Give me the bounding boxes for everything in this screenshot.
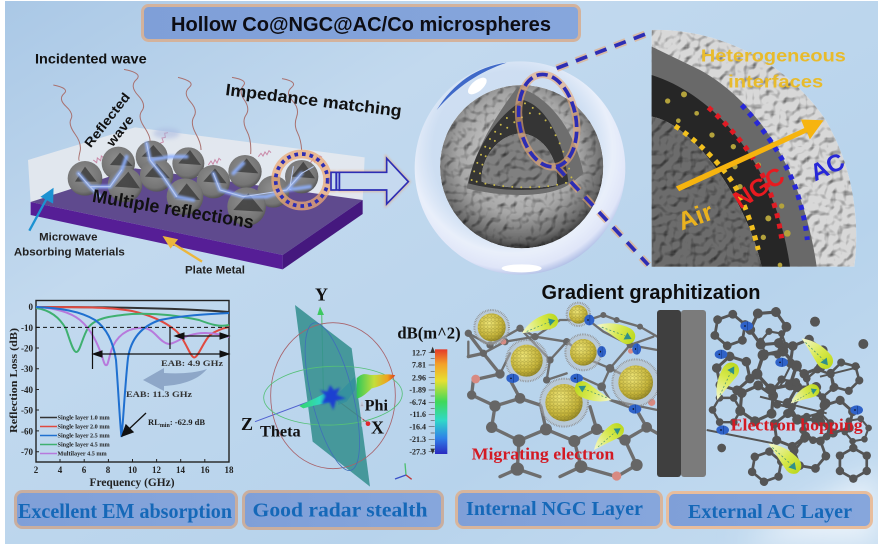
caption: excellent EM absorption xyxy=(16,492,236,528)
axis labels xyxy=(241,285,389,441)
label: electron hopping: Electron hopping xyxy=(731,416,863,435)
x axis tick labels: 4 xyxy=(58,465,63,475)
y axis tick labels: 0 xyxy=(28,302,34,312)
highlighted sphere dotted ring xyxy=(276,154,328,206)
block arrow to enlarged sphere xyxy=(331,158,408,204)
label: plate metal: Plate Metal xyxy=(185,264,245,276)
panel: external AC amorphous network xyxy=(704,299,875,489)
heading: gradient graphitization: Gradient graphitization xyxy=(542,281,760,304)
label: microwave absorbing materials xyxy=(14,231,125,259)
label: NGC: NGC xyxy=(729,162,790,214)
axis titles: Reflection Loss (dB) xyxy=(8,328,20,433)
panel: internal NGC graphene network xyxy=(465,303,659,481)
phi pointer xyxy=(360,401,364,427)
x axis tick labels: 18 xyxy=(224,465,234,475)
label: RL min: : -62.9 dB xyxy=(170,417,205,427)
axis titles xyxy=(8,328,175,489)
label: microwave absorbing materials: Absorbing Materials xyxy=(14,247,125,259)
label: incidented wave: Incidented wave xyxy=(35,51,147,66)
arrow: RL min pointer xyxy=(122,413,146,436)
EAB labels: EAB: 11.3 GHz xyxy=(126,389,192,399)
title banner xyxy=(142,6,580,40)
colour bar tick labels: -11.6 xyxy=(410,410,426,419)
x axis tick labels xyxy=(34,465,234,475)
label: heterogeneous interfaces xyxy=(701,46,846,92)
axis titles: Frequency (GHz) xyxy=(90,477,175,489)
bumpy sphere shell xyxy=(440,85,603,248)
interface dotted lines xyxy=(675,105,807,250)
legend: Single layer 4.5 mm xyxy=(58,442,110,448)
label: heterogeneous interfaces: interfaces xyxy=(728,72,823,92)
legend xyxy=(40,414,110,458)
colour bar tick labels: -16.4 xyxy=(409,422,426,431)
colour bar tick labels: -21.3 xyxy=(409,435,426,444)
label: AC: AC xyxy=(806,148,849,187)
colour bar tick labels: -27.3 xyxy=(409,447,426,456)
axis labels: Y xyxy=(315,285,328,305)
nitrogen dopant nodes xyxy=(471,325,655,481)
label: air: Air xyxy=(674,198,717,236)
legend: Multilayer 4.5 mm xyxy=(58,450,108,458)
y axis tick labels xyxy=(21,302,34,457)
y axis tick labels: -40 xyxy=(21,385,33,395)
label: microwave absorbing materials: Microwave xyxy=(39,231,97,243)
y axis tick labels: -20 xyxy=(21,344,33,354)
x axis tick labels: 6 xyxy=(82,465,87,475)
colour bar tick labels: 12.7 xyxy=(412,348,426,357)
y axis tick labels: -70 xyxy=(21,447,33,457)
colour bar xyxy=(429,347,447,454)
panel: radar cross section plot xyxy=(241,285,461,487)
axis labels: Phi xyxy=(365,397,389,414)
amorphous carbon rings xyxy=(704,299,875,489)
label: reflected wave: Reflected xyxy=(81,90,133,150)
panel: microwave absorbing layer scheme xyxy=(14,51,408,276)
panel: NGC and AC layer bars xyxy=(657,310,706,477)
caption: excellent EM absorption: Excellent EM absorption xyxy=(18,499,232,523)
carbon-shelled cobalt particles xyxy=(474,303,659,427)
x axis tick labels: 16 xyxy=(200,465,210,475)
label: RL min: min xyxy=(160,423,170,429)
colour bar tick labels: -6.74 xyxy=(409,398,426,407)
label: reflected wave: wave xyxy=(103,112,137,150)
y axis tick labels: -10 xyxy=(21,323,33,333)
title banner: Hollow Co@NGC@AC/Co microspheres xyxy=(171,13,551,36)
lattice nodes xyxy=(465,312,652,476)
label: migrating electron: Migrating electron xyxy=(472,444,615,463)
legend: Single layer 2.5 mm xyxy=(58,432,110,440)
arrow: absorbing material pointer xyxy=(29,190,52,231)
reference plane xyxy=(295,305,370,487)
migrating electron comets xyxy=(518,311,638,454)
graphene lattice xyxy=(468,315,657,477)
embedded cobalt dots xyxy=(665,91,791,267)
axis labels: Theta xyxy=(260,424,301,441)
absorbing microspheres xyxy=(68,141,318,226)
axes xyxy=(255,307,370,426)
x axis tick labels: 14 xyxy=(176,465,186,475)
caption: good radar stealth: Good radar stealth xyxy=(252,500,428,522)
colour bar tick labels: -1.89 xyxy=(409,386,426,395)
arrow: bandwidth broadening xyxy=(143,368,207,391)
label: impedance matching: Impedance matching xyxy=(225,80,403,121)
dashed zoom ellipse and guide lines xyxy=(512,32,652,265)
gradient direction arrow xyxy=(677,120,823,191)
y axis tick labels: -50 xyxy=(21,406,33,416)
blue electrons xyxy=(506,315,641,414)
white absorber layer wall xyxy=(28,127,365,253)
caption: internal NGC layer xyxy=(456,492,662,528)
reference circles xyxy=(263,318,403,475)
axis labels: X xyxy=(371,417,384,437)
y axis tick labels: -30 xyxy=(21,364,33,374)
multiple-reflection lightning xyxy=(78,143,313,200)
caption: external AC layer: External AC Layer xyxy=(688,502,852,523)
panel: enlarged hollow sphere xyxy=(415,32,652,275)
sphere cutaway wedges xyxy=(75,145,315,212)
intermediate gray layer xyxy=(652,47,817,267)
caption: internal NGC layer: Internal NGC Layer xyxy=(466,498,643,520)
EAB markers xyxy=(36,327,229,369)
plot frame and axes xyxy=(36,300,229,462)
EAB labels xyxy=(126,358,223,399)
label: multiple reflections: Multiple reflections xyxy=(91,185,256,233)
caption: good radar stealth xyxy=(244,492,442,528)
dark NGC layer xyxy=(652,75,790,267)
caption: external AC layer xyxy=(668,492,872,528)
colour bar tick labels: 2.96 xyxy=(412,373,426,382)
inner air cavity surface xyxy=(652,117,762,267)
plate metal slab xyxy=(31,168,363,269)
blue electrons xyxy=(715,321,863,435)
EAB labels: EAB: 4.9 GHz xyxy=(161,358,223,368)
hopping electron comets xyxy=(708,331,837,477)
cutaway interior xyxy=(467,87,583,195)
label: RL min: RL xyxy=(148,417,160,427)
label: heterogeneous interfaces: Heterogeneous xyxy=(701,46,846,66)
transparent bubble xyxy=(415,61,625,275)
x axis tick labels: 10 xyxy=(128,465,138,475)
axis labels: Z xyxy=(241,414,253,434)
colour bar tick labels: 7.81 xyxy=(412,361,426,370)
incident and reflected waves xyxy=(53,69,322,165)
orientation triad xyxy=(395,463,412,479)
panel: shell cross-section close-up xyxy=(652,30,856,267)
x axis tick labels: 2 xyxy=(34,465,39,475)
x axis tick labels: 8 xyxy=(106,465,111,475)
RCS lobes xyxy=(299,374,395,410)
data curves xyxy=(36,307,229,437)
chart: reflection loss xyxy=(8,300,234,489)
arrow: plate metal pointer xyxy=(165,238,202,262)
x axis tick labels: 12 xyxy=(152,465,162,475)
legend: Single layer 1.0 mm xyxy=(58,414,110,422)
outer AC shell xyxy=(652,30,856,267)
legend: Single layer 2.0 mm xyxy=(58,424,110,430)
y axis tick labels: -60 xyxy=(21,426,33,436)
colour scale title: dB(m^2) xyxy=(397,323,461,342)
colour bar tick labels xyxy=(409,348,426,456)
